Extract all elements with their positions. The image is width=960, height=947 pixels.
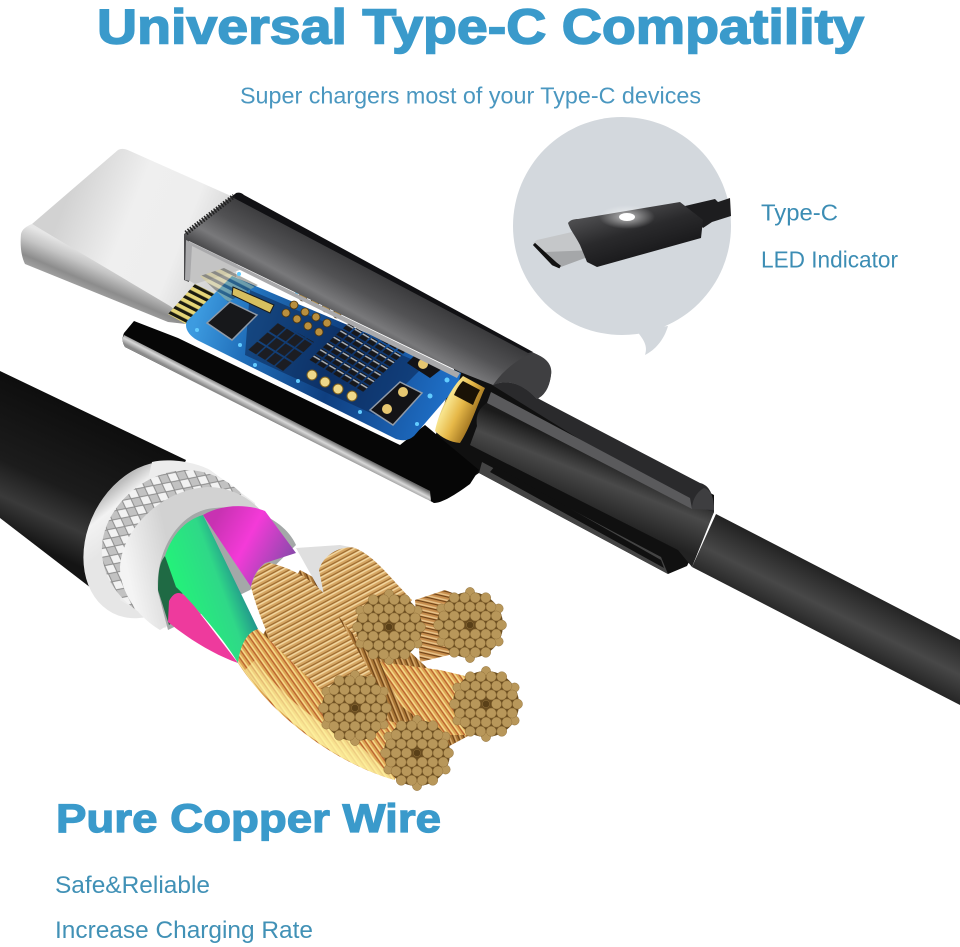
title: Universal Type-C Compatility <box>97 0 864 54</box>
white inner jacket ring <box>58 439 242 641</box>
copper core end: left <box>318 670 392 746</box>
copper bundle backing <box>260 570 470 775</box>
rear right copper strand <box>415 590 470 662</box>
resistor grid <box>308 322 407 393</box>
dark board area <box>245 290 425 415</box>
black cable jacket <box>0 371 186 608</box>
heading: Pure Copper Wire: Pure Copper Wire <box>56 797 441 841</box>
copper core end: top <box>352 589 426 665</box>
gold ring <box>435 376 485 443</box>
text: Safe&Reliable: Safe&Reliable <box>55 872 210 899</box>
faded contact traces <box>200 268 258 302</box>
green wire sleeve <box>165 515 258 663</box>
PCB base <box>186 276 461 440</box>
stripped cable cross-section <box>0 371 522 791</box>
ribbon connector <box>232 287 274 313</box>
copper core end: far right <box>450 666 522 742</box>
metal braid shield <box>102 470 260 626</box>
opening shadow <box>158 556 190 625</box>
circuit board <box>168 268 461 440</box>
callout: LED indicator bubble <box>513 117 731 355</box>
subtitle: Super chargers most of your Type-C devices <box>240 82 701 108</box>
ribbed front edge <box>186 196 234 233</box>
text: Increase Charging Rate: Increase Charging Rate <box>55 917 313 944</box>
pink wire sleeve <box>168 593 238 663</box>
gold contact fingers <box>168 284 232 332</box>
chip contact dots <box>382 359 428 414</box>
housing inner lip <box>185 240 460 378</box>
glowing board lights <box>195 272 450 426</box>
gold pads, upper <box>282 293 341 336</box>
label: LED Indicator: LED Indicator <box>761 246 898 272</box>
magenta wire sleeve <box>203 506 296 587</box>
top copper strand <box>319 547 412 655</box>
strand highlight <box>245 660 395 780</box>
capacitor grid <box>247 322 314 372</box>
silver plug <box>21 149 240 325</box>
lower right chip <box>370 382 422 425</box>
icon: small Type-C connector with LED <box>533 198 731 268</box>
upper right chip <box>407 353 443 378</box>
gold pads, lower <box>307 370 357 401</box>
copper core end: rear right <box>434 587 506 663</box>
sleeve opening <box>158 507 296 630</box>
lower copper strand <box>238 629 405 780</box>
right copper strand <box>380 662 482 735</box>
gold ring dark top <box>454 381 480 405</box>
cable strain relief and main cable <box>420 366 960 705</box>
housing interior <box>190 243 240 284</box>
copper core end: bottom <box>380 715 454 791</box>
metal housing cover <box>184 193 551 399</box>
lower shell <box>123 321 479 503</box>
label: Type-C: Type-C <box>761 200 838 226</box>
inner white sleeve <box>120 487 296 630</box>
cutaway Type-C connector <box>21 149 960 705</box>
main chip <box>207 302 257 340</box>
speech bubble <box>513 117 731 355</box>
white wire sleeve <box>296 545 355 605</box>
large copper strand <box>251 563 375 735</box>
white jacket extension <box>120 460 260 628</box>
